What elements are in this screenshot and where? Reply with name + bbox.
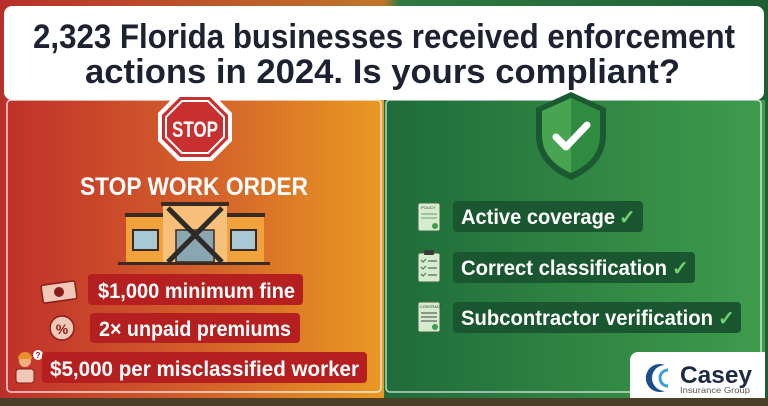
penalty: misclassified worker: ?: [36, 351, 41, 360]
logo: Casey Insurance Group: [630, 352, 765, 398]
panel: compliance: [384, 92, 765, 398]
logo: Casey Insurance Group: Casey: [680, 362, 753, 389]
item: active coverage: POLICY: [421, 205, 436, 210]
item: correct classification: Correct classification: [461, 257, 667, 280]
logo: Casey Insurance Group: Insurance Group: [680, 385, 750, 395]
item: subcontractor verification: CONTRACT: [420, 304, 443, 309]
item: correct classification: [418, 250, 695, 283]
bottom strip: [0, 398, 768, 406]
icon: shield with check: [536, 92, 606, 180]
icon: closed building: [118, 202, 270, 265]
penalty: unpaid premiums: [50, 313, 300, 343]
icon: stop sign: [158, 93, 232, 161]
panel: penalties: [3, 93, 384, 398]
item: subcontractor verification: [418, 302, 741, 333]
title box: [4, 6, 764, 100]
item: active coverage: Active coverage: [461, 206, 615, 229]
penalty: unpaid premiums: %: [56, 321, 69, 337]
item: active coverage: ✓: [619, 207, 636, 229]
item: correct classification: ✓: [672, 258, 689, 280]
penalty: unpaid premiums: 2× unpaid premiums: [99, 318, 291, 341]
penalty: misclassified worker: [16, 350, 367, 383]
heading: stop work order: STOP WORK ORDER: [80, 173, 308, 201]
item: active coverage: [418, 201, 643, 232]
title: actions in 2024. Is yours compliant?: [85, 53, 680, 91]
icon: stop sign: STOP: [172, 117, 218, 142]
item: subcontractor verification: Subcontractor verification: [461, 307, 713, 330]
title: [33, 18, 735, 91]
penalty: minimum fine: $1,000 minimum fine: [98, 280, 295, 303]
penalty: misclassified worker: $5,000 per misclassified worker: [50, 358, 359, 381]
item: subcontractor verification: ✓: [718, 308, 735, 330]
penalty: minimum fine: [41, 274, 303, 305]
